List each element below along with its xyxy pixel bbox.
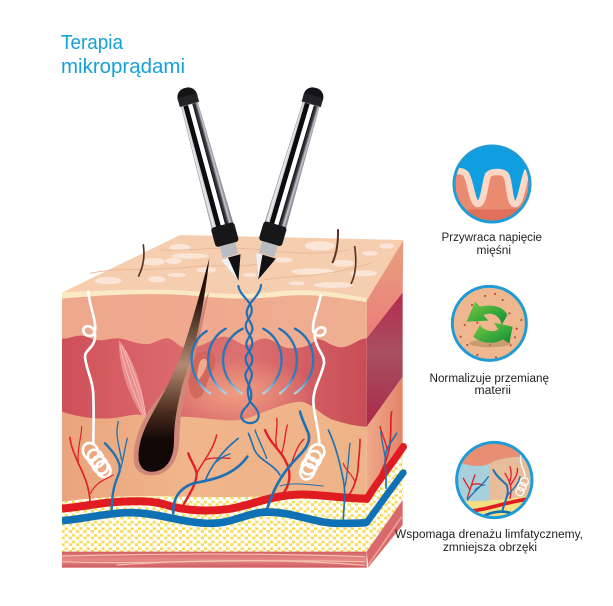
- top surface hairs: [139, 230, 356, 283]
- left electrode pen: [173, 85, 249, 284]
- label: lymphatic drainage: [395, 529, 583, 554]
- title: mikroprądami: [61, 56, 185, 78]
- front face layers: [62, 258, 367, 568]
- right electrode pen: [248, 85, 328, 283]
- title: [61, 32, 185, 78]
- hypodermis layer: [62, 402, 367, 507]
- icon: metabolism: [452, 286, 526, 360]
- hair follicle and shaft: [134, 258, 209, 475]
- label: metabolism: Normalizuje przemianę: [430, 373, 549, 385]
- icon: muscle tension: [452, 144, 532, 224]
- title: Terapia: [61, 32, 124, 54]
- microcurrent field arcs: [192, 329, 313, 393]
- icon: lymphatic drainage: [455, 440, 535, 520]
- label: muscle tension: [442, 232, 542, 257]
- cream surface band: [62, 290, 367, 302]
- label: muscle tension: Przywraca napięcie: [442, 232, 542, 244]
- label: metabolism: materii: [474, 385, 511, 397]
- white nerves: [80, 292, 327, 482]
- label: lymphatic drainage: Wspomaga drenażu limfatycznemy,: [395, 529, 583, 541]
- fat layer: [62, 496, 367, 552]
- skin cross-section cube: [62, 230, 403, 568]
- dermis layer: [62, 336, 367, 430]
- epidermis layer: [62, 294, 366, 348]
- label: muscle tension: mięśni: [476, 245, 511, 257]
- blue vein: [62, 512, 367, 523]
- sebaceous gland: [189, 351, 215, 399]
- blue capillaries: [105, 412, 350, 519]
- label: metabolism: [430, 373, 549, 397]
- muscle layer: [62, 552, 367, 568]
- label: lymphatic drainage: zmniejsza obrzęki: [443, 542, 537, 554]
- twisted current strands: [238, 285, 261, 423]
- arrector pili muscle: [119, 340, 146, 422]
- right side face: [367, 240, 403, 567]
- side vessels: [367, 412, 403, 523]
- red capillaries: [70, 418, 360, 505]
- top skin surface: [62, 235, 403, 301]
- red artery: [62, 495, 367, 511]
